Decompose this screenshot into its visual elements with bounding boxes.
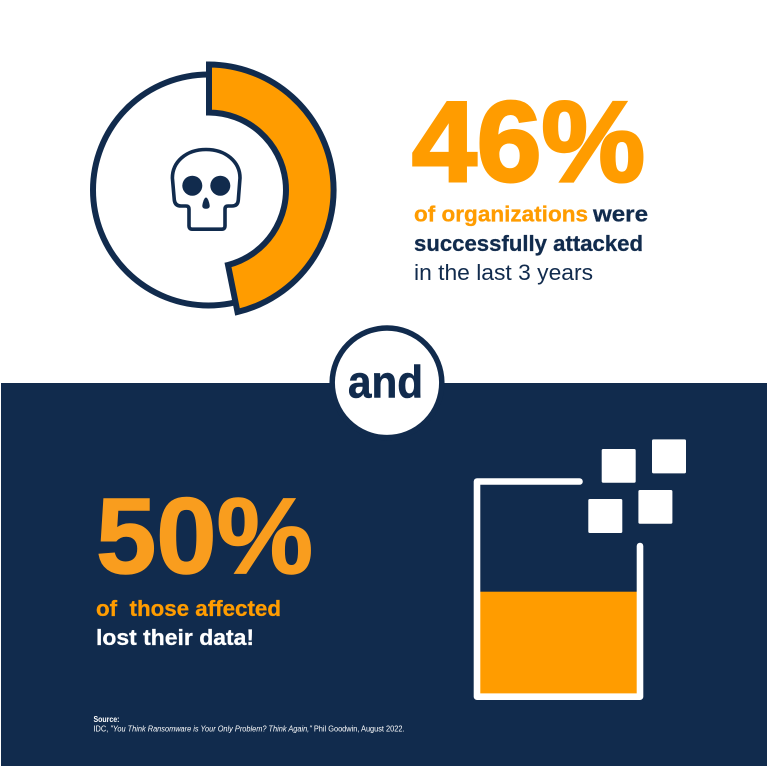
- panel: lower navy section: [1, 383, 767, 766]
- container fill level: [480, 592, 637, 694]
- text block: 50% description: lost their data!: [96, 625, 254, 650]
- icon: skull: [172, 150, 240, 229]
- text block: 50% description: [96, 596, 281, 650]
- text block: 46% description: [414, 202, 648, 285]
- text block: 46% description: successfully attacked: [414, 231, 643, 256]
- data blocks: [588, 439, 686, 533]
- connector badge: and: [332, 328, 442, 438]
- connector badge: and: and: [348, 356, 423, 408]
- stat: 46%: 46%: [412, 79, 645, 206]
- text block: 50% description: of those affected: [96, 596, 281, 621]
- stat: 50%: 50%: [96, 475, 313, 596]
- text block: 46% description: of organizations: [414, 202, 588, 226]
- source note: IDC, "You Think Ransomware is Your Only Problem? Think Again," Phil Goodwin, August 2022.: [94, 724, 404, 734]
- donut chart: 46 percent: [93, 64, 334, 312]
- text block: 46% description: were: [592, 202, 648, 226]
- text block: 46% description: in the last 3 years: [414, 260, 593, 285]
- container outline: [477, 482, 640, 697]
- source note: [94, 715, 404, 734]
- icon: partially filled data container: [477, 439, 686, 697]
- source note: Source:: [94, 715, 120, 724]
